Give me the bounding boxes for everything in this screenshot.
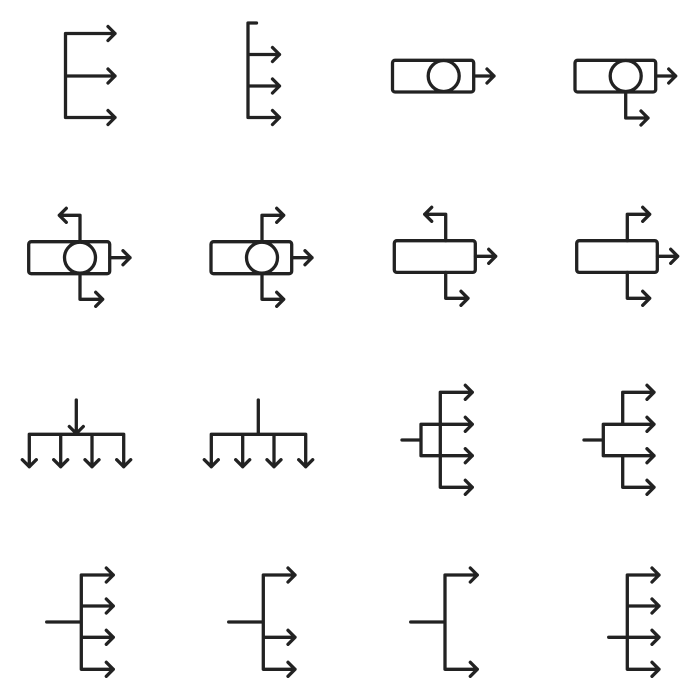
icon: nested bracket with four right arrows, crossing (402, 385, 472, 494)
icon: down arrow splitting into four down arrows (22, 400, 131, 467)
icon: box with up-left, right and down-right arrows (394, 207, 496, 305)
icon: stem splitting into four down arrows (204, 400, 313, 467)
icon: box with circle, up-left, right and down-right arrows (29, 208, 130, 306)
icon: bar with four right arrows and a line crossing through (609, 568, 659, 676)
icon: box with up-right, right and down-right arrows (577, 207, 678, 305)
icon: stub bar with three arrows (248, 23, 280, 124)
icon: stem into bar with three right arrows (229, 568, 295, 676)
icon: nested bracket with four right arrows, split (584, 385, 654, 494)
icon: stem into bar with four right arrows (47, 568, 113, 676)
icon: three arrows from a vertical bar (66, 26, 115, 124)
icon: box with circle and right arrow (392, 60, 494, 92)
icon: stem into bar with two right arrows (411, 568, 477, 676)
icon: box with circle, right arrow and lower arrow (575, 60, 676, 125)
icon: box with circle, up-right, right and down-right arrows (211, 208, 312, 306)
